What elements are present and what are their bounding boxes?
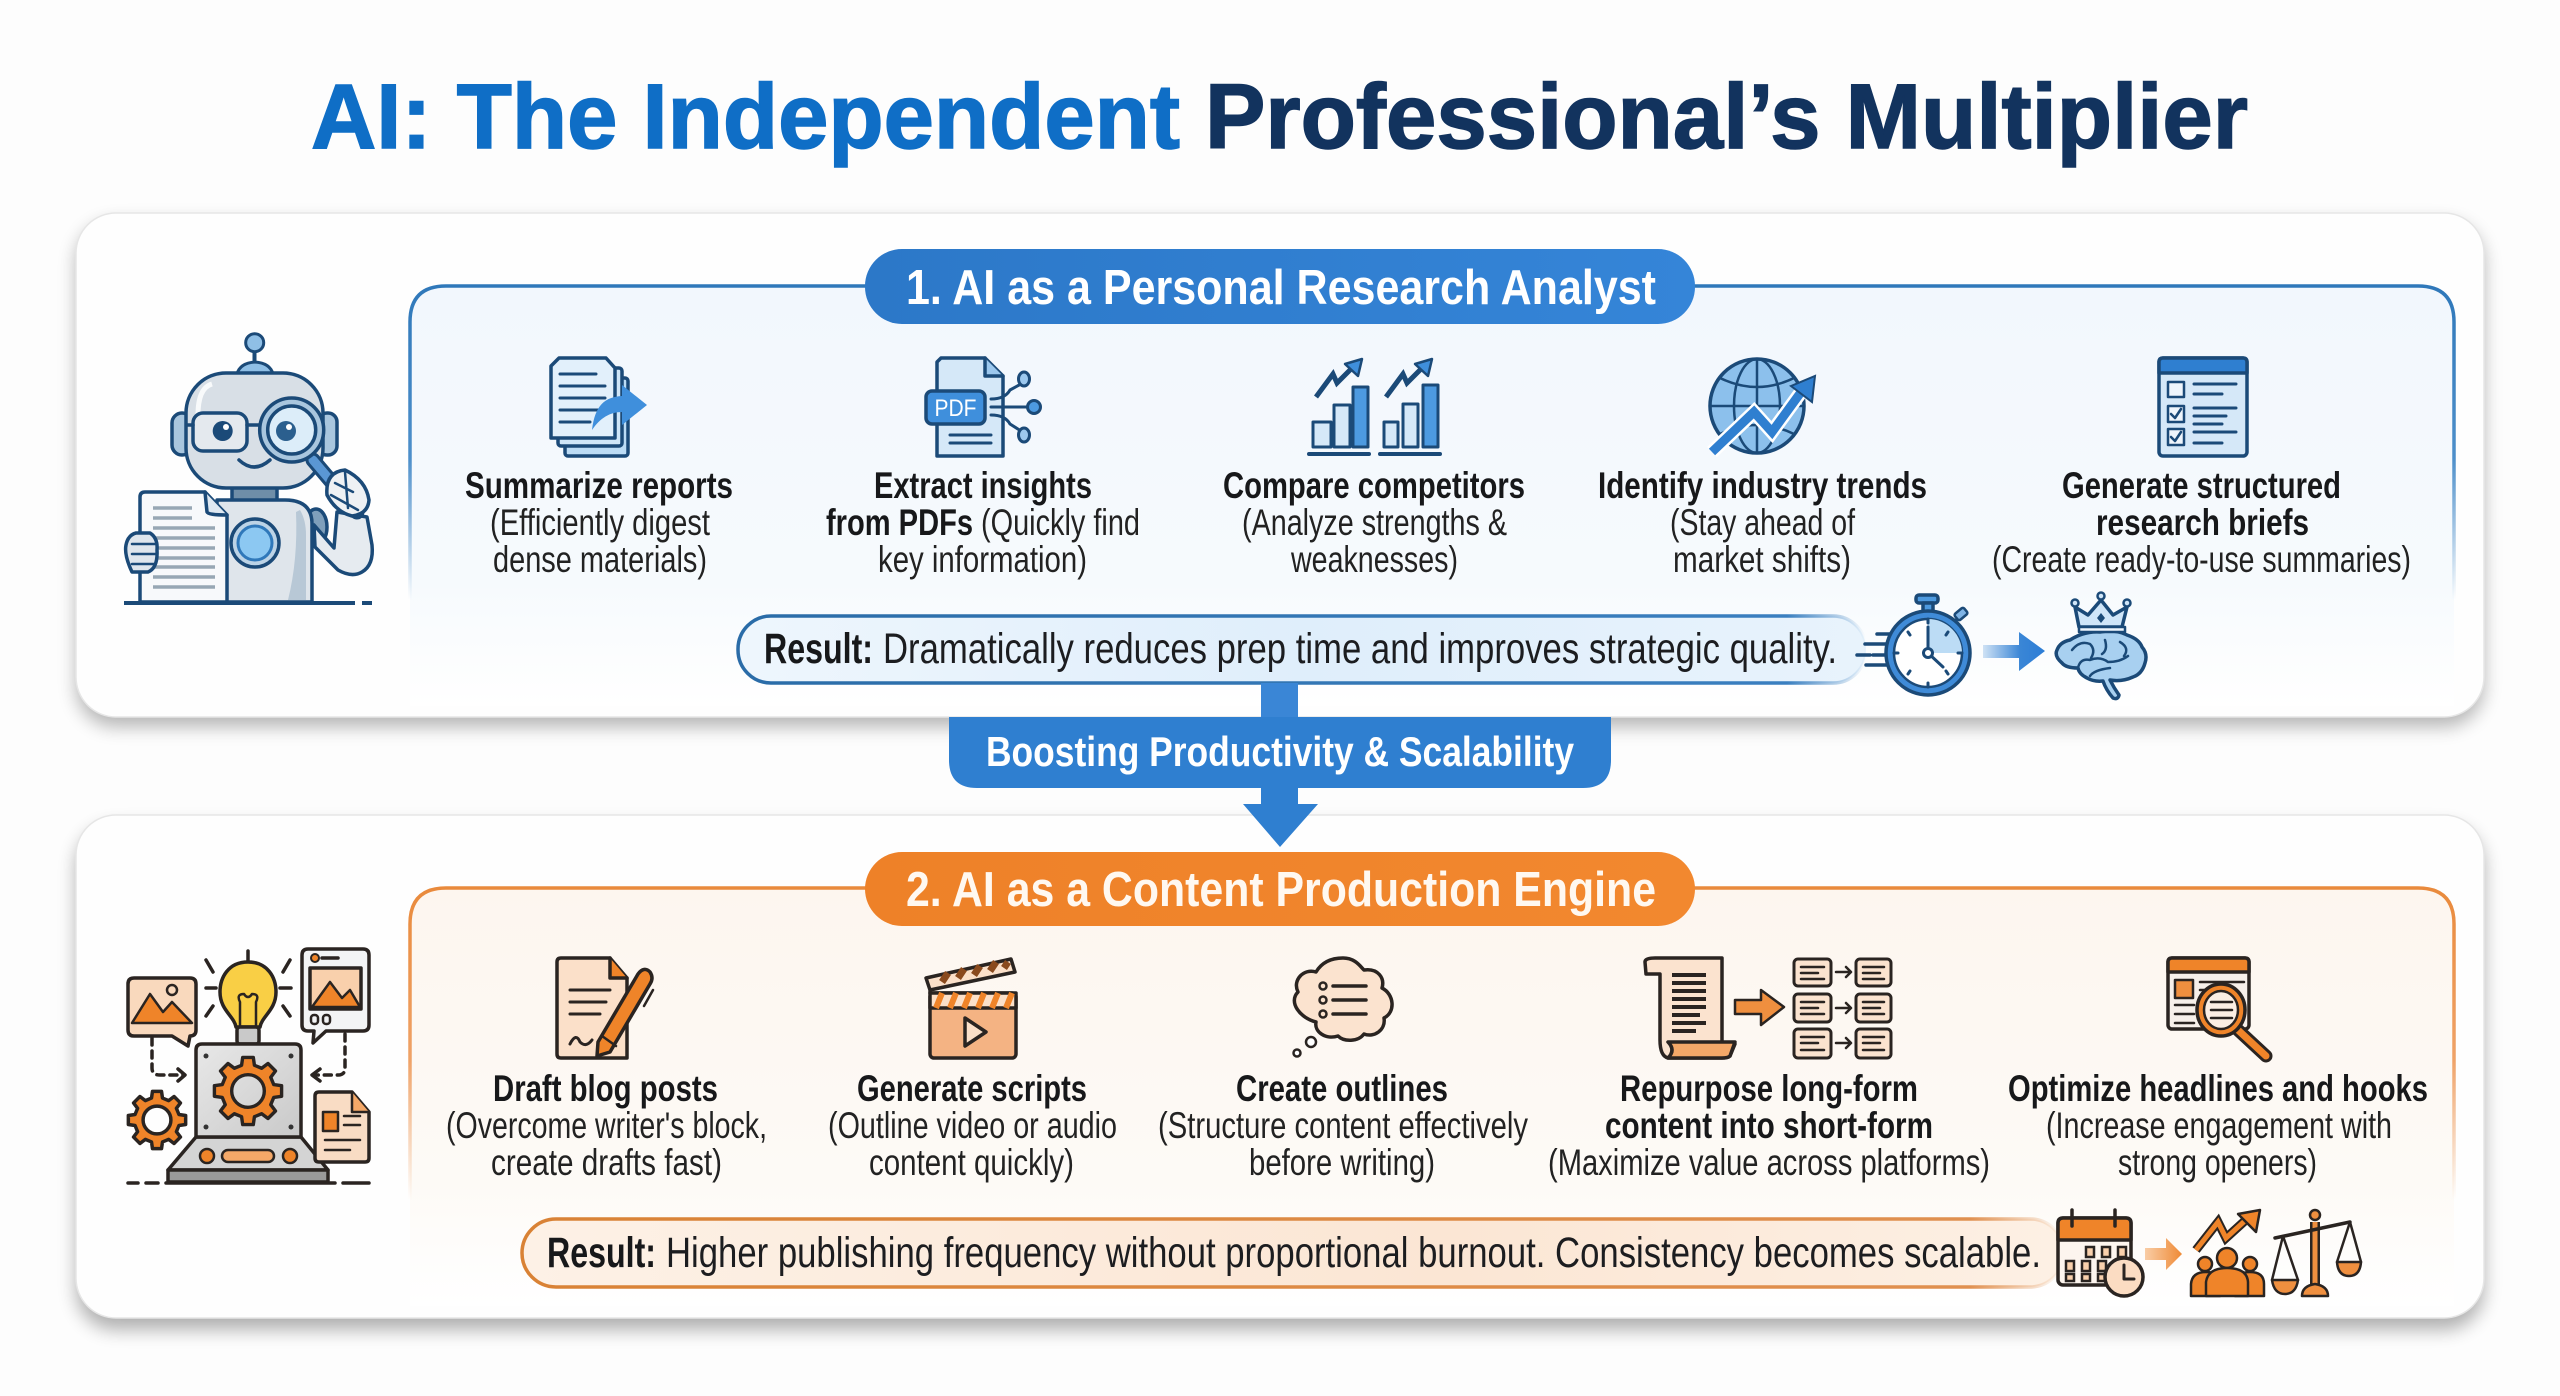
section heading pill: 1. AI as a Personal Research Analyst	[906, 261, 1656, 315]
item: summarize reports: dense materials)	[493, 539, 707, 580]
icon: checklist browser window	[2159, 358, 2247, 456]
item: create outlines: (Structure content effectively	[1158, 1105, 1528, 1146]
icon: browser with magnifier	[2168, 958, 2266, 1056]
panel: content engine	[76, 815, 2484, 1330]
icon: document stack with arrow	[551, 358, 647, 456]
item: generate structured research briefs	[1992, 358, 2411, 580]
item: generate structured research briefs: (Create ready-to-use summaries)	[1992, 539, 2411, 580]
item: generate structured research briefs: research briefs	[2096, 502, 2309, 543]
icon: PDF document with nodes: PDF	[934, 395, 976, 422]
item: generate scripts	[828, 959, 1117, 1183]
connector arrow: boosting productivity and scalability: Boosting Productivity & Scalability	[986, 728, 1575, 775]
item: compare competitors	[1223, 359, 1525, 580]
title: Professional’s Multiplier	[1205, 66, 2248, 168]
item: repurpose long-form: content into short-form	[1605, 1105, 1933, 1146]
item: generate scripts: content quickly)	[869, 1142, 1074, 1183]
result callout: content: Result:	[547, 1229, 656, 1277]
item: draft blog posts: create drafts fast)	[491, 1142, 722, 1183]
item: optimize headlines: (Increase engagement with	[2046, 1105, 2392, 1146]
result callout: research: Dramatically reduces prep time and improves strategic quality.	[883, 625, 1837, 673]
inner section background	[410, 888, 2454, 1306]
title: AI: The Independent	[311, 66, 1180, 168]
item: draft blog posts	[446, 958, 767, 1183]
item: create outlines	[1158, 958, 1528, 1183]
item: identify industry trends: (Stay ahead of	[1670, 502, 1856, 543]
icon: brain with crown	[2056, 592, 2146, 699]
item: generate structured research briefs: Generate structured	[2062, 465, 2341, 506]
inner section background	[410, 286, 2454, 706]
icon: clapperboard	[926, 959, 1016, 1058]
item: generate scripts: (Outline video or audio	[828, 1105, 1117, 1146]
title	[311, 66, 2248, 168]
item: optimize headlines: Optimize headlines and hooks	[2008, 1068, 2428, 1109]
illustration: robot with magnifier	[124, 334, 372, 603]
connector arrow: boosting productivity and scalability	[949, 683, 1611, 847]
icon: PDF document with nodes	[926, 358, 1040, 456]
item: generate scripts: Generate scripts	[857, 1068, 1087, 1109]
icon: calendar with clock	[2058, 1210, 2143, 1296]
icon: growth chart with team	[2191, 1210, 2264, 1296]
section heading pill	[865, 249, 1695, 324]
item: compare competitors: Compare competitors	[1223, 465, 1525, 506]
item: extract insights: (Quickly find	[981, 502, 1140, 543]
item: summarize reports	[465, 358, 733, 580]
panel: research analyst	[76, 213, 2484, 727]
item: repurpose long-form	[1548, 958, 1990, 1183]
item: draft blog posts: (Overcome writer's block,	[446, 1105, 767, 1146]
icon: scroll to short pieces	[1645, 958, 1891, 1058]
arrow: consistency to growth	[2145, 1238, 2182, 1270]
icon: document with pen	[557, 958, 653, 1058]
item: compare competitors: (Analyze strengths &	[1242, 502, 1507, 543]
item: draft blog posts: Draft blog posts	[493, 1068, 718, 1109]
icon: two rising bar charts	[1309, 359, 1440, 454]
section heading pill: 2. AI as a Content Production Engine	[906, 863, 1656, 917]
section heading pill	[865, 852, 1695, 926]
icon: globe with trend arrow	[1710, 359, 1815, 453]
item: create outlines: Create outlines	[1236, 1068, 1448, 1109]
icon: thought bubble outline	[1294, 958, 1392, 1056]
item: identify industry trends: market shifts)	[1673, 539, 1851, 580]
item: create outlines: before writing)	[1249, 1142, 1435, 1183]
item: repurpose long-form: (Maximize value across platforms)	[1548, 1142, 1990, 1183]
item: summarize reports: Summarize reports	[465, 465, 733, 506]
result callout: research	[738, 616, 1866, 683]
item: repurpose long-form: Repurpose long-form	[1620, 1068, 1918, 1109]
item: identify industry trends	[1598, 359, 1927, 580]
item: extract insights: Extract insights	[874, 465, 1092, 506]
icon: balance scale	[2272, 1210, 2361, 1296]
item: extract insights: key information)	[878, 539, 1087, 580]
item: extract insights	[826, 358, 1140, 580]
result callout: content: Higher publishing frequency without proportional burnout. Consistency becomes scalable.	[666, 1229, 2041, 1277]
item: optimize headlines: strong openers)	[2118, 1142, 2317, 1183]
illustration: idea machine	[128, 949, 369, 1183]
icon: stopwatch	[1857, 595, 1970, 695]
result callout: research: Result:	[764, 625, 873, 673]
item: optimize headlines	[2008, 958, 2428, 1183]
item: compare competitors: weaknesses)	[1290, 539, 1458, 580]
result callout: content	[522, 1219, 2064, 1287]
item: identify industry trends: Identify industry trends	[1598, 465, 1927, 506]
item: summarize reports: (Efficiently digest	[490, 502, 711, 543]
arrow: time to strategic quality	[1983, 632, 2045, 671]
item: extract insights: from PDFs	[826, 502, 973, 543]
